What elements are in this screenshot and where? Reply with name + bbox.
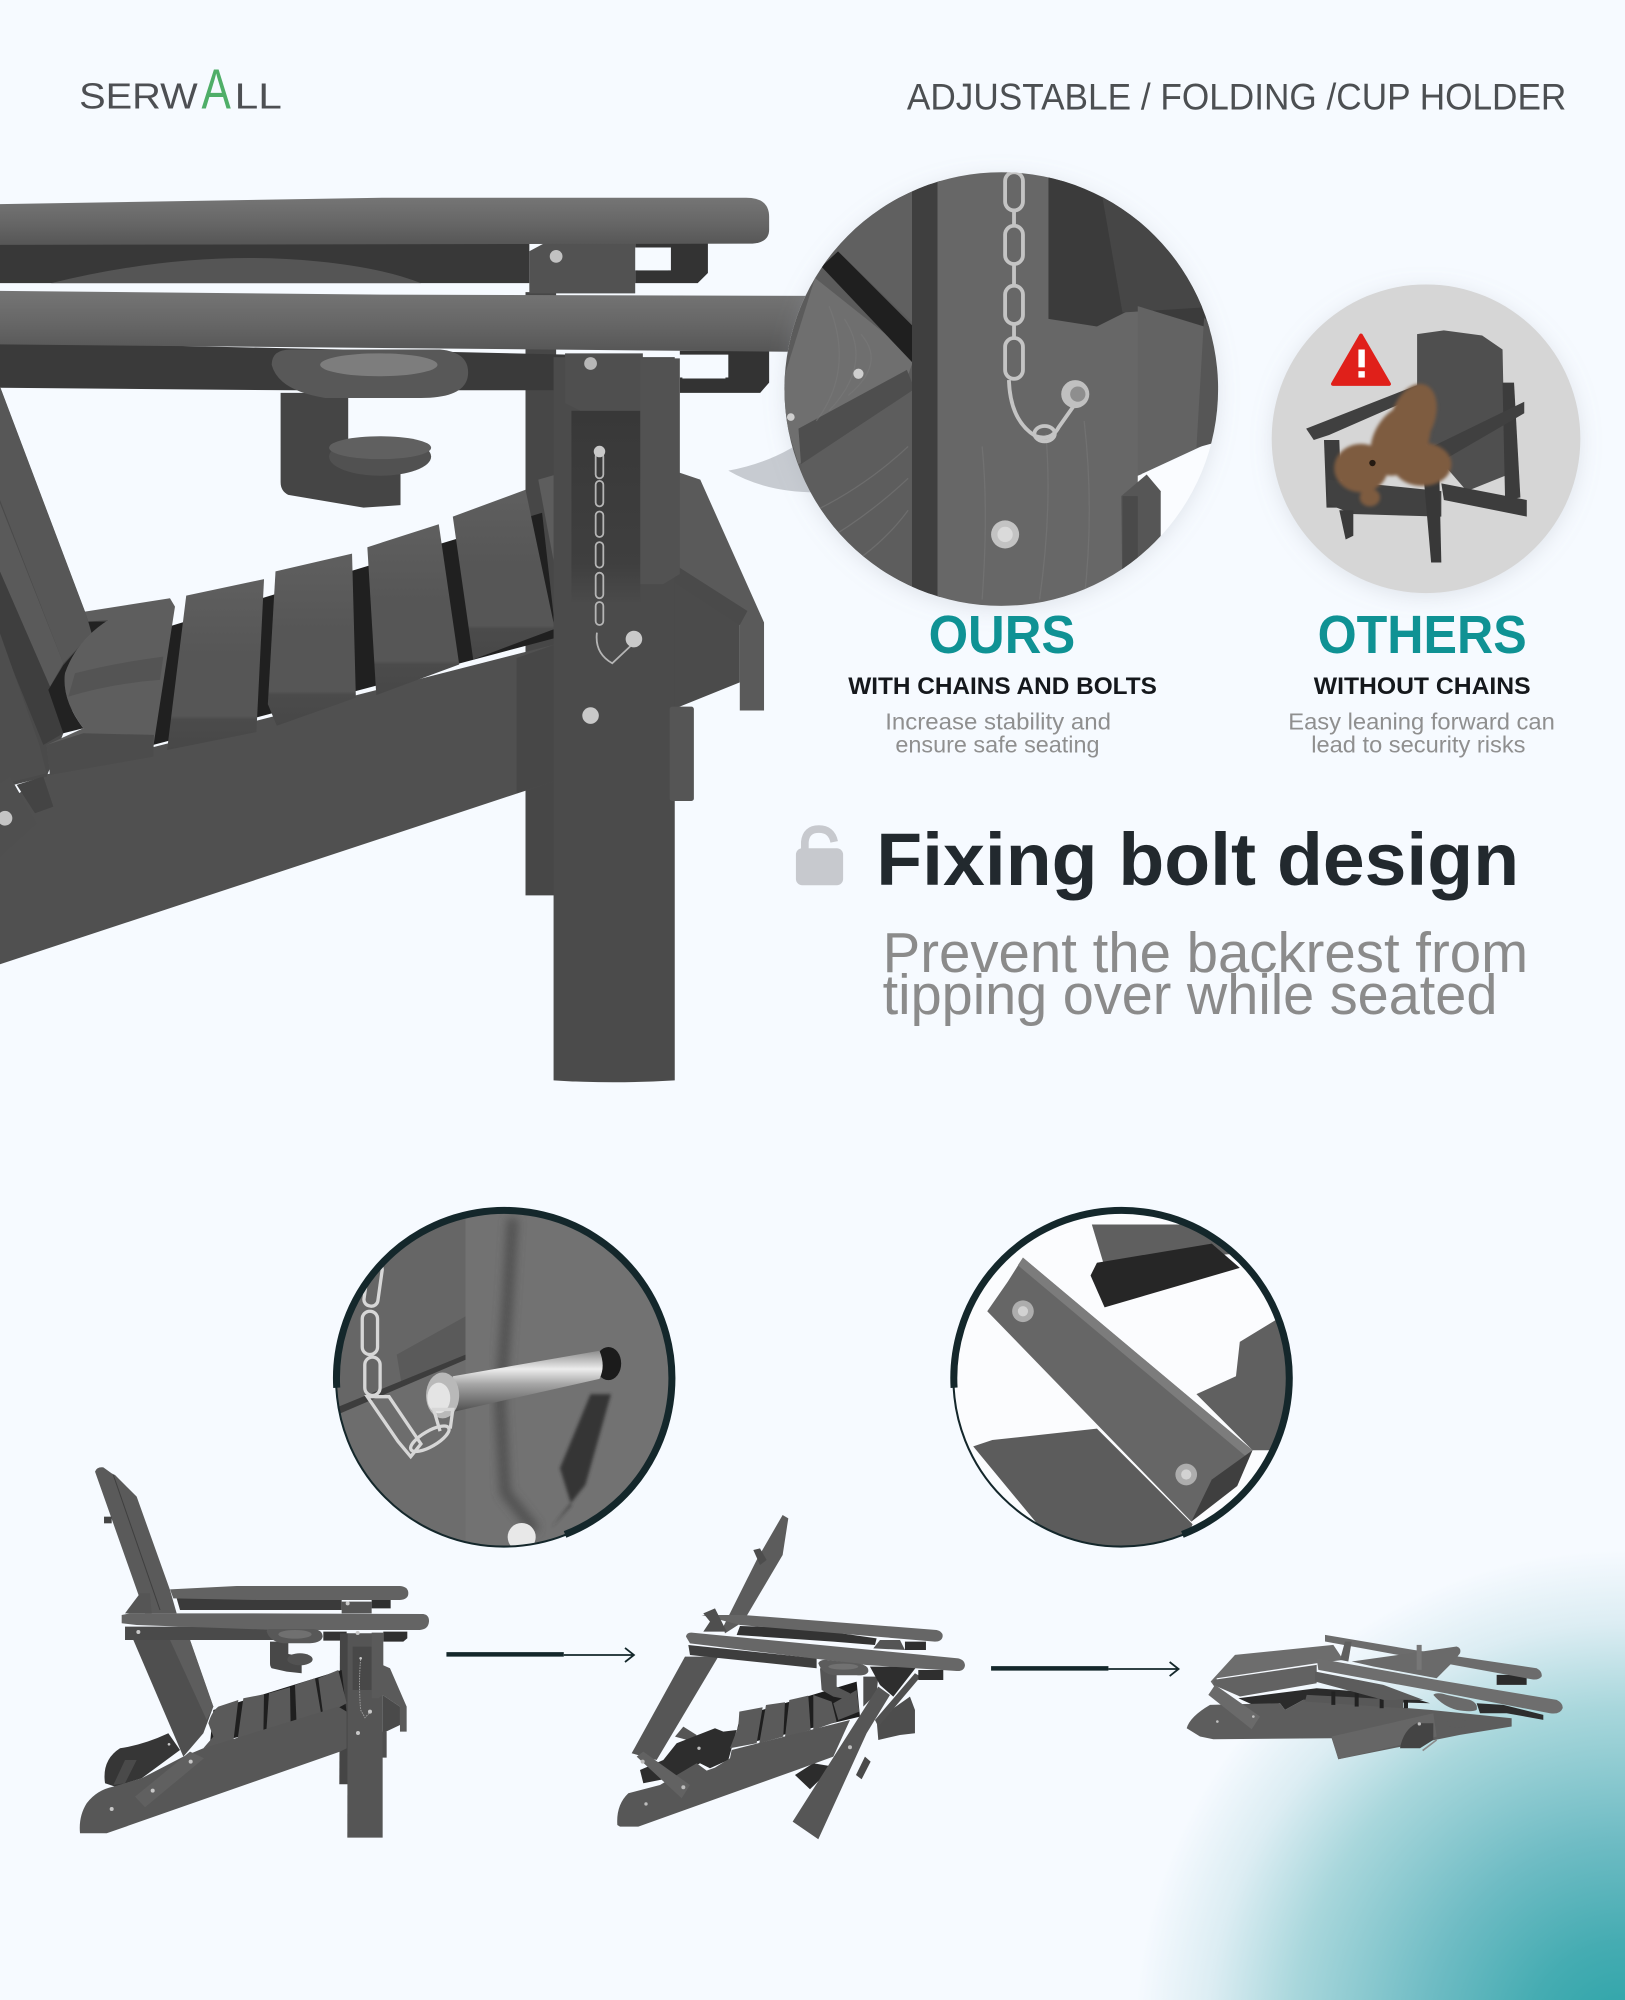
others label bbox=[1288, 606, 1555, 758]
circle outline bbox=[336, 1211, 672, 1547]
logo: Serwall bbox=[79, 57, 282, 120]
rear leg bbox=[526, 292, 556, 895]
large chair close-up bbox=[0, 198, 816, 1082]
chain close-up bbox=[1005, 172, 1074, 441]
chair: half folded bbox=[617, 1515, 965, 1839]
arrow: step one bbox=[446, 1648, 634, 1662]
heading: fixing bolt design: Fixing bolt design bbox=[876, 818, 1519, 901]
circle outline bbox=[953, 1211, 1289, 1547]
callout pointer bbox=[728, 431, 816, 492]
armrest bolt bbox=[584, 357, 597, 370]
teddy bear bbox=[1334, 377, 1452, 506]
ours label: WITH CHAINS AND BOLTS bbox=[848, 673, 1157, 700]
others label: WITHOUT CHAINS bbox=[1314, 673, 1531, 700]
chair: fully folded bbox=[1187, 1635, 1563, 1759]
front armrest underside bbox=[0, 342, 568, 390]
subheading: Prevent the backrest from bbox=[883, 921, 1528, 984]
others label: lead to security risks bbox=[1311, 732, 1526, 758]
detail circle: hinge bbox=[953, 1210, 1301, 1550]
ours label bbox=[848, 606, 1157, 758]
back arm bracket bbox=[635, 242, 708, 283]
wood grain bbox=[816, 417, 1090, 600]
post upright bbox=[640, 358, 680, 584]
others label: Easy leaning forward can bbox=[1288, 709, 1555, 735]
front seat box bbox=[673, 471, 764, 710]
subheading: tipping over while seated bbox=[883, 963, 1497, 1026]
chain bolts bbox=[582, 446, 642, 724]
detail circle: others bbox=[1272, 284, 1580, 593]
front post bbox=[554, 357, 675, 1082]
post bracket bbox=[565, 353, 643, 411]
front armrest bbox=[0, 291, 816, 352]
back armrest bbox=[0, 198, 769, 245]
post clip bbox=[670, 707, 694, 801]
mini chair bbox=[1306, 330, 1527, 562]
logo: Serwall: LL bbox=[235, 76, 282, 116]
warning triangle bbox=[1333, 335, 1389, 384]
bolts bbox=[1061, 380, 1089, 408]
pin bbox=[600, 1347, 622, 1380]
header tagline: ADJUSTABLE / FOLDING /CUP HOLDER bbox=[907, 77, 1566, 118]
lower bolt bbox=[508, 1523, 536, 1546]
logo: Serwall: SERW bbox=[79, 76, 198, 116]
back armrest underside bbox=[0, 242, 529, 283]
pin shadow bbox=[557, 1392, 612, 1521]
others label: OTHERS bbox=[1318, 606, 1527, 665]
icon: open lock bbox=[796, 829, 843, 885]
backrest and first slat bbox=[0, 387, 175, 857]
ours label: ensure safe seating bbox=[895, 732, 1099, 758]
ours label: Increase stability and bbox=[885, 709, 1111, 735]
chair: unfolded bbox=[80, 1467, 429, 1838]
chain bbox=[362, 1262, 453, 1457]
seat underlay bbox=[77, 513, 556, 765]
ours label: OURS bbox=[929, 606, 1075, 665]
subheading bbox=[883, 921, 1528, 1026]
arrow: step two bbox=[991, 1662, 1179, 1676]
detail circle: ours bbox=[778, 166, 1224, 619]
logo: Serwall: A bbox=[202, 57, 231, 120]
side rail bbox=[0, 644, 556, 964]
seat slats bbox=[167, 579, 264, 750]
detail circle: pin bbox=[332, 1205, 676, 1551]
chain bbox=[596, 453, 634, 663]
cup holder bbox=[272, 349, 468, 508]
